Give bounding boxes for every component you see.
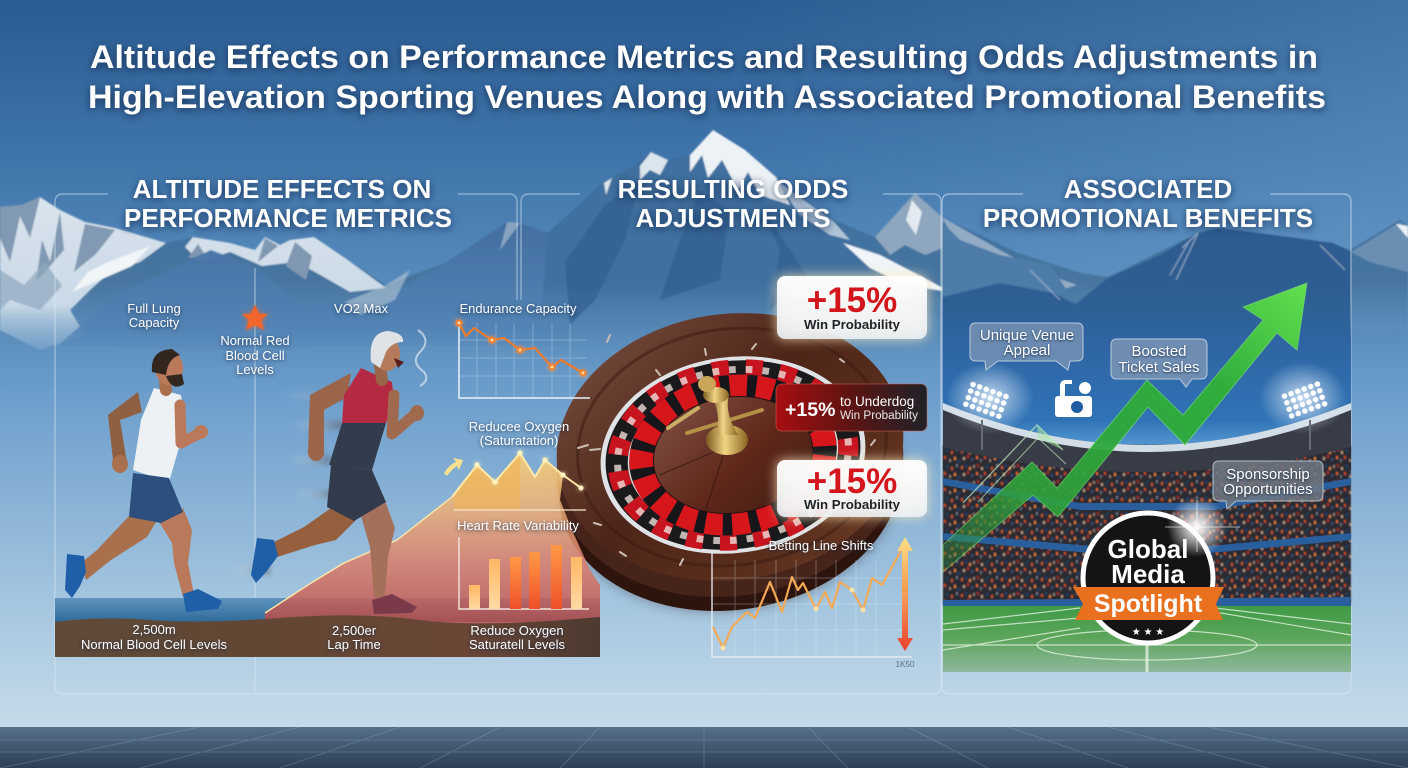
callout: unique venue appeal: Appeal	[1004, 342, 1050, 359]
sparkle	[1165, 497, 1240, 557]
ghost chevron	[963, 425, 1066, 503]
heading: altitude effects: ALTITUDE EFFECTS ON	[133, 174, 431, 204]
ground captions: Normal Blood Cell Levels	[81, 637, 227, 652]
heading: resulting odds adjustments	[618, 174, 848, 233]
ground strip	[55, 615, 600, 657]
floodlight left	[946, 362, 1034, 450]
heading: altitude effects: PERFORMANCE METRICS	[124, 203, 452, 233]
chart: betting line shifts: Betting Line Shifts	[769, 538, 874, 553]
callout: unique venue appeal	[970, 323, 1083, 370]
icon: camera	[1055, 380, 1092, 417]
badge: global media spotlight	[1073, 497, 1240, 643]
ground captions: 2,500er	[332, 623, 377, 638]
label: full lung capacity: Capacity	[129, 315, 180, 330]
callout: boosted ticket sales: Boosted	[1131, 343, 1187, 360]
growth arrow	[943, 283, 1307, 572]
heading: associated promotional benefits: ASSOCIATED	[1064, 174, 1232, 204]
chart: endurance capacity: Endurance Capacity	[459, 301, 577, 316]
badge: global media spotlight: ★ ★ ★	[1132, 627, 1164, 638]
heading: altitude effects	[124, 174, 452, 233]
floodlight right	[1259, 362, 1347, 450]
main title: Altitude Effects on Performance Metrics and Resulting Odds Adjustments in	[90, 39, 1318, 75]
roulette wheel	[539, 291, 921, 633]
arrow: down	[897, 592, 913, 651]
ground captions	[81, 622, 566, 652]
chart: endurance capacity	[456, 301, 590, 398]
rim studs	[578, 335, 875, 565]
chart: betting line shifts	[712, 537, 915, 669]
odds card: +15% win probability top	[777, 276, 927, 339]
chart: heart rate variability	[457, 518, 589, 609]
badge: global media spotlight: Spotlight	[1094, 590, 1203, 618]
ribbon	[1073, 587, 1224, 620]
odds card: +15% to underdog: Win Probability	[840, 410, 918, 422]
main title: High-Elevation Sporting Venues Along with Associated Promotional Benefits	[88, 79, 1326, 115]
odds card: +15% win probability bottom	[777, 460, 927, 517]
label: VO2 max: VO2 Max	[334, 301, 389, 316]
sea strip	[55, 598, 600, 622]
panel: altitude effects on performance metrics	[55, 174, 600, 657]
horizon floor	[0, 727, 1408, 768]
panel outlines	[55, 194, 941, 694]
rising altitude hill	[265, 453, 600, 650]
label: normal red blood cell levels: Levels	[236, 362, 274, 377]
panel: resulting odds adjustments	[539, 174, 927, 669]
chart: reduced oxygen saturation	[444, 419, 586, 510]
callout: sponsorship opportunities: Sponsorship	[1226, 466, 1310, 483]
motion streaks behind older runner	[230, 392, 345, 575]
icon: breath wisps	[416, 330, 426, 386]
heading: associated promotional benefits	[983, 174, 1313, 233]
ground captions: Lap Time	[327, 637, 381, 652]
panel: associated promotional benefits	[942, 174, 1351, 694]
badge: global media spotlight: Global	[1108, 534, 1188, 564]
label: normal red blood cell levels	[220, 333, 290, 377]
badge: global media spotlight: Media	[1111, 559, 1185, 589]
callout: boosted ticket sales	[1111, 339, 1207, 387]
ground captions: 2,500m	[132, 622, 176, 637]
label: normal red blood cell levels: Normal Red	[220, 333, 290, 348]
ground captions: Saturatell Levels	[469, 637, 566, 652]
brass spindle	[668, 376, 762, 455]
heading: resulting odds adjustments: RESULTING ODDS	[618, 174, 848, 204]
callout: boosted ticket sales: Ticket Sales	[1118, 359, 1200, 376]
label: full lung capacity	[127, 301, 181, 330]
chart: heart rate variability: Heart Rate Variability	[457, 518, 579, 533]
odds card: +15% win probability top: Win Probability	[804, 317, 901, 332]
odds card: +15% to underdog	[776, 384, 927, 431]
icon: orange star	[242, 305, 268, 330]
arrow: up	[897, 537, 913, 592]
ground captions: Reduce Oxygen	[470, 623, 564, 638]
odds card: +15% to underdog: +15%	[785, 399, 835, 421]
main title	[88, 39, 1326, 115]
odds card: +15% win probability bottom: Win Probability	[804, 497, 901, 512]
runner: young low-altitude athlete	[65, 349, 222, 612]
odds card: +15% win probability bottom: +15%	[807, 462, 897, 501]
mountain range backdrop	[0, 130, 1408, 400]
label: full lung capacity: Full Lung	[127, 301, 181, 316]
chart: betting line shifts: 1K50	[896, 660, 915, 669]
label: normal red blood cell levels: Blood Cell	[225, 348, 285, 363]
runner: older high-altitude athlete	[251, 331, 424, 614]
heading: associated promotional benefits: PROMOTIONAL BENEFITS	[983, 203, 1313, 233]
stadium scene	[943, 300, 1351, 672]
callout: sponsorship opportunities	[1213, 461, 1323, 509]
odds card: +15% win probability top: +15%	[807, 281, 897, 320]
panel frame	[942, 194, 1351, 694]
number pockets	[606, 355, 860, 555]
heading: resulting odds adjustments: ADJUSTMENTS	[635, 203, 831, 233]
chart: reduced oxygen saturation: (Saturatation)	[480, 433, 558, 448]
odds card: +15% to underdog: to Underdog	[840, 394, 914, 409]
callout: unique venue appeal: Unique Venue	[980, 327, 1074, 344]
icon: small arrow	[444, 458, 463, 476]
callout: sponsorship opportunities: Opportunities	[1223, 481, 1313, 498]
chart: reduced oxygen saturation: Reducee Oxygen	[469, 419, 569, 434]
